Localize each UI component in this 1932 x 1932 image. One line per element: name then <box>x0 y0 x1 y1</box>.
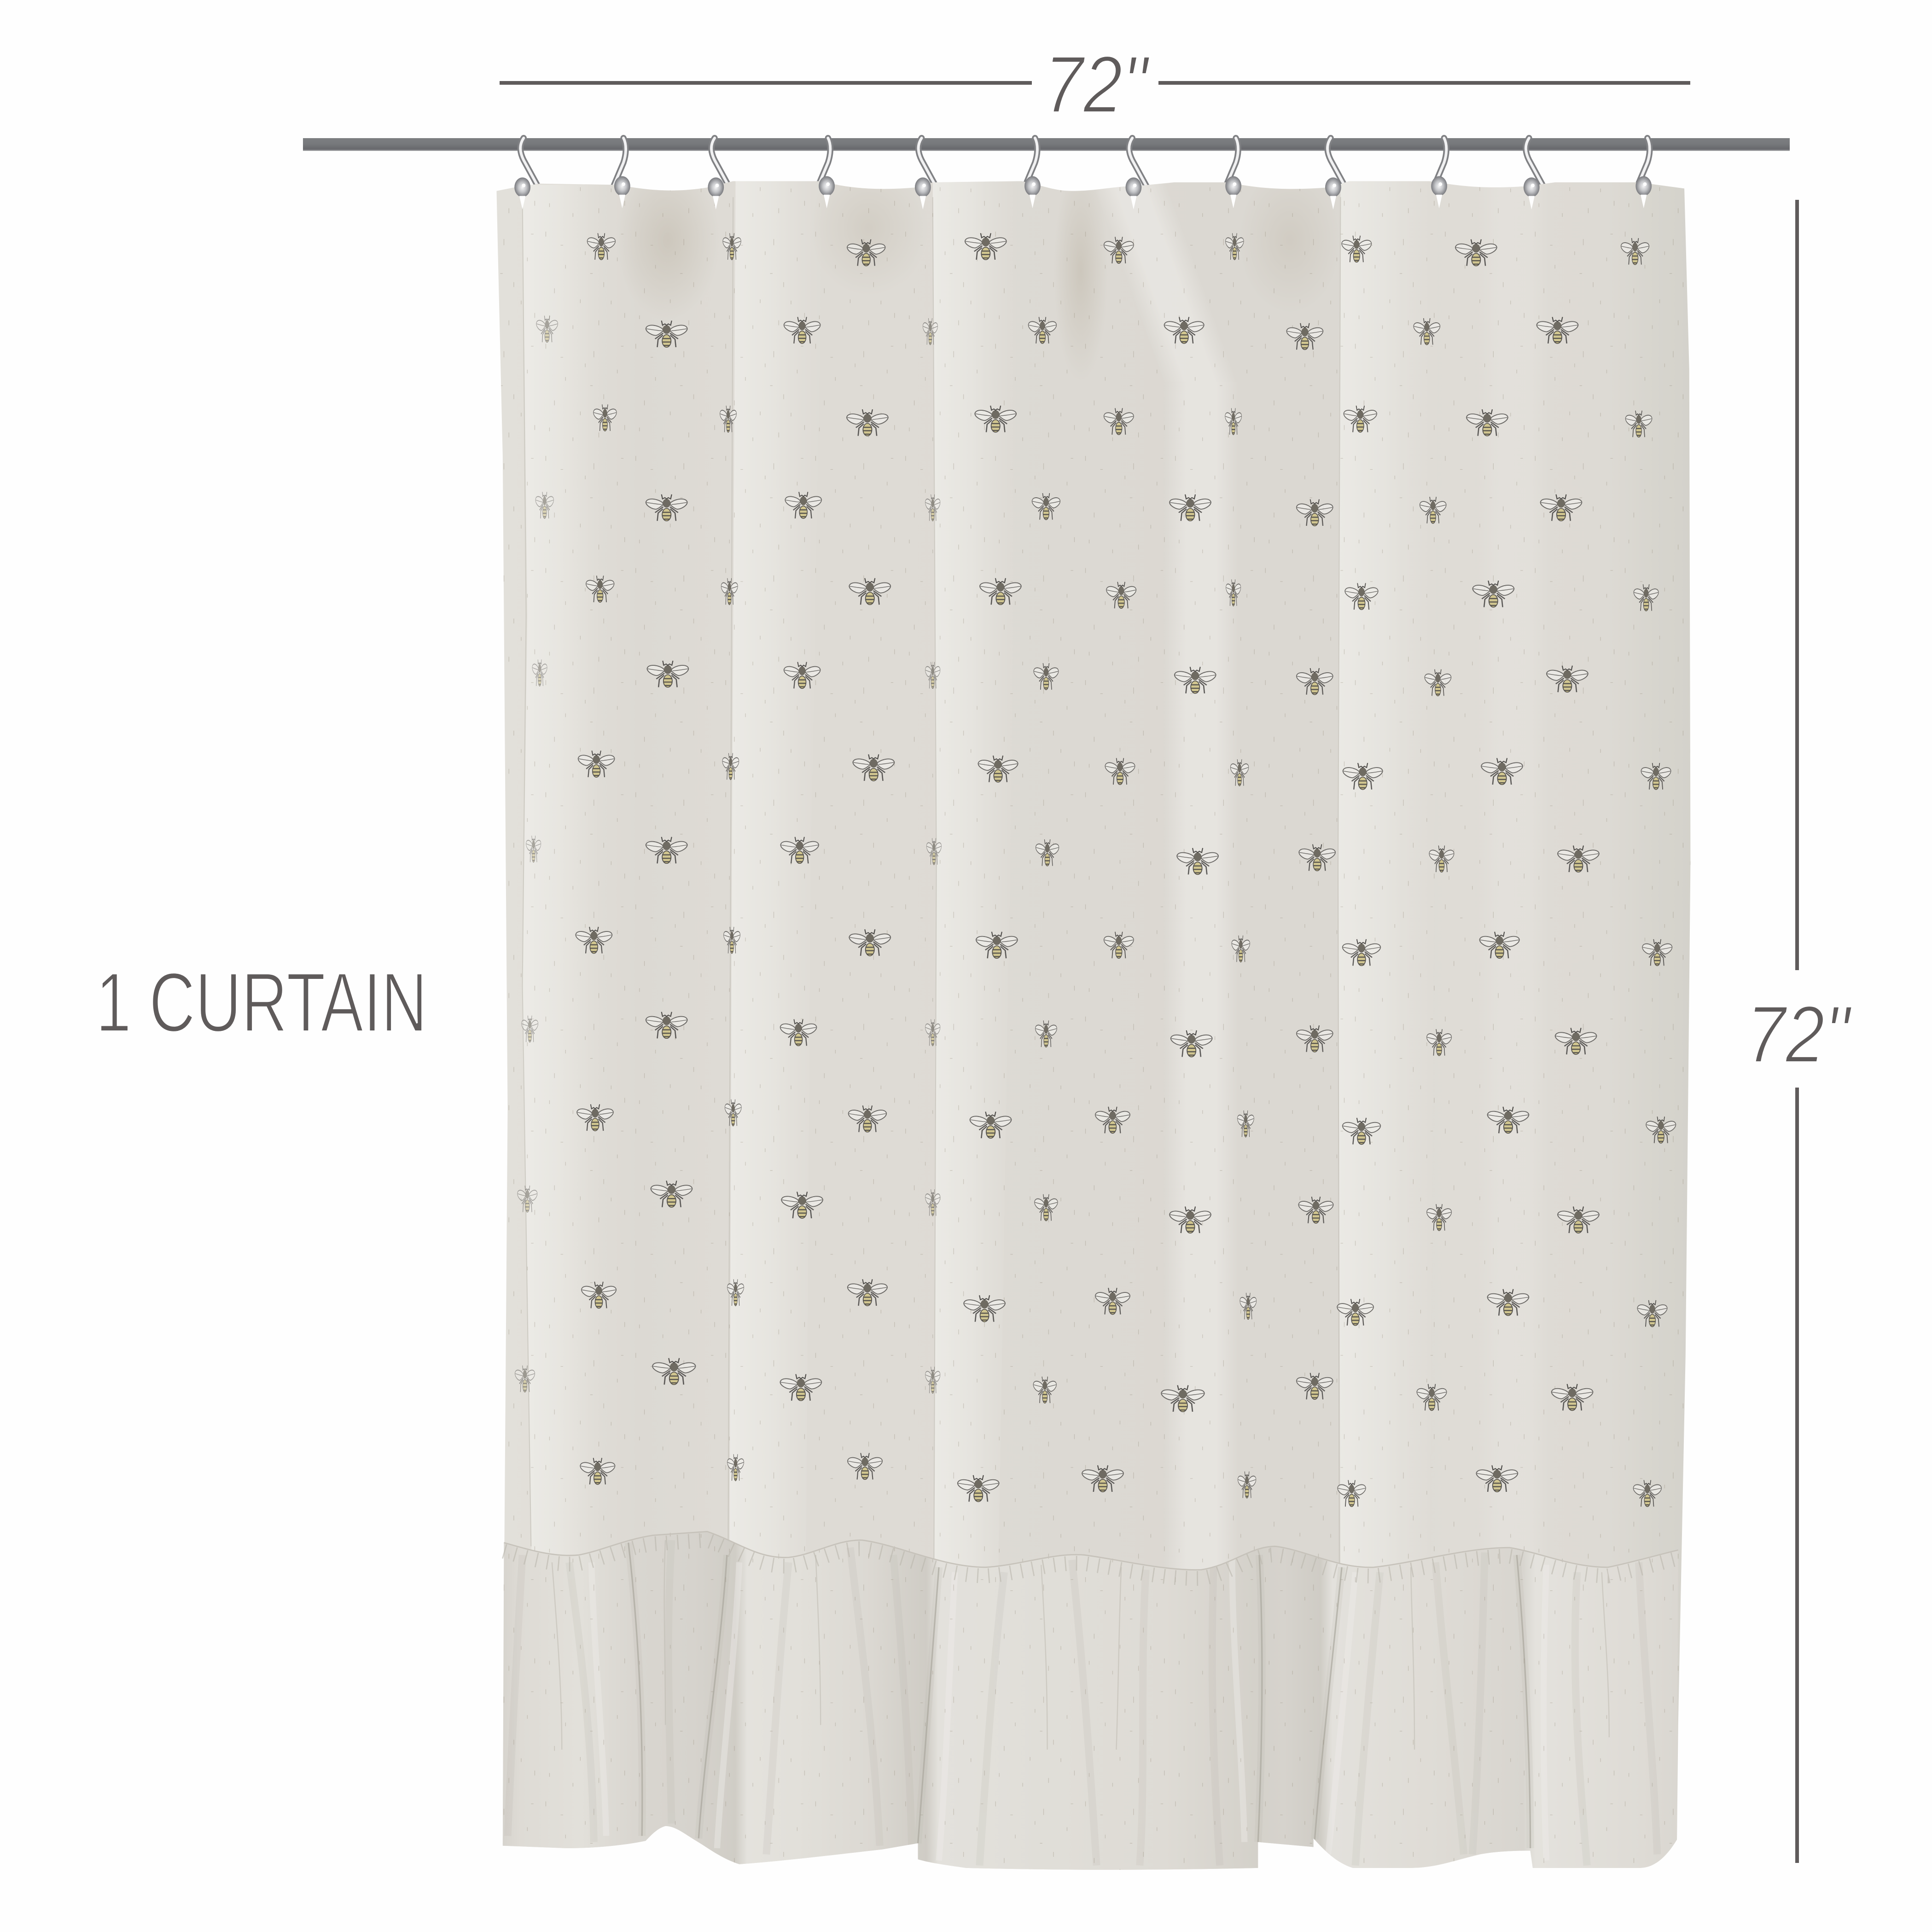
deep panel gaps <box>628 1542 1530 1848</box>
fine pleats from the seam <box>552 1540 1609 1750</box>
bee embroidery pattern <box>515 233 1676 1507</box>
chrome hooks behind curtain <box>520 138 1650 187</box>
ball ends of hooks <box>514 176 1652 209</box>
height dimension: line, 72 inch label, line <box>1746 200 1853 1863</box>
bright fabric folds <box>523 181 1394 1569</box>
width dimension: line, 72 inch label, line: 72" <box>1044 40 1151 130</box>
height dimension: line, 72 inch label, line: 72" <box>1746 989 1853 1080</box>
curtain count label: 1 CURTAIN <box>96 955 427 1049</box>
bright pleat highlights <box>591 1555 1546 1861</box>
shower rod <box>303 138 1790 151</box>
wide soft shadow under pleats <box>508 1540 1657 1865</box>
ruffle seam line <box>504 1531 1678 1570</box>
gathered bottom ruffle <box>493 1522 1700 1879</box>
linen flecks <box>500 187 1691 1671</box>
soft top staining shadows <box>634 191 1315 342</box>
linen flecks on ruffle <box>493 1522 1700 1879</box>
gathers along the ruffle seam <box>504 1540 1677 1578</box>
fold crease lines <box>523 197 1340 1565</box>
curtain fabric panel <box>493 160 1700 1873</box>
curtain illustration with hooks, folds, ruffle and bees <box>493 138 1700 1879</box>
width dimension: line, 72 inch label, line <box>500 40 1690 130</box>
